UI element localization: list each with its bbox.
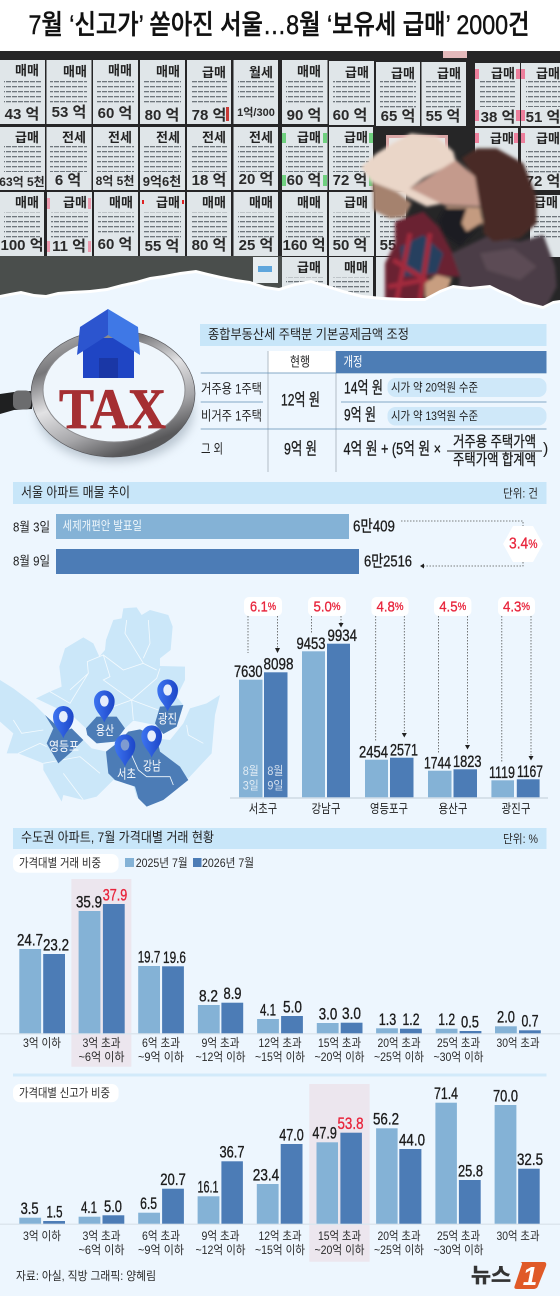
map labels: 영등포 (49, 739, 79, 754)
logo: News1: 1 (523, 1261, 537, 1291)
group: Yongsan (424, 597, 482, 816)
row: others: ) (543, 440, 548, 458)
category labels: 3억 이하 (23, 1036, 61, 1050)
row: non-resident: 시가 약 13억원 수준 (391, 408, 478, 423)
listing cards: row 2: 전세 (156, 130, 180, 145)
listing cards: row 2: 63억 5천 (0, 175, 45, 189)
value labels: 4.1 (260, 1000, 276, 1020)
section heading: 서울 아파트 매물 추이 (21, 485, 130, 500)
listing cards: row 3: 매매 (15, 195, 39, 210)
section heading: metro apartment transactions: 단위: % (503, 832, 538, 846)
listing cards: row 1: 급매 (391, 66, 415, 81)
listing cards: row 3: 매매 (109, 195, 133, 210)
row: others: 그 외 (201, 442, 223, 456)
pin: Seocho (115, 734, 135, 767)
value labels: 8.9 (224, 984, 242, 1003)
value labels: 70.0 (493, 1086, 518, 1106)
dotted change bracket (401, 521, 523, 566)
category labels: 30억 초과 (496, 1229, 540, 1243)
pin: Yongsan (94, 690, 115, 723)
value labels (21, 1084, 543, 1222)
listing cards: row 1: 매매 (297, 64, 321, 79)
value labels: 5.0 (283, 998, 302, 1016)
category labels (23, 1229, 540, 1257)
value labels: 2.0 (497, 1008, 515, 1026)
listing cards: row 1: 매매 (156, 64, 180, 79)
callout: 3.4%: 3.4% (509, 536, 538, 552)
value labels: 23.4 (253, 1166, 279, 1184)
category labels: ~30억 이하 (434, 1243, 484, 1257)
sub-heading pill: record-high share: 가격대별 신고가 비중 (19, 1086, 110, 1100)
listing cards: row 1: 65 억 (381, 108, 415, 125)
listing cards: row 2: 60 억 (287, 172, 321, 189)
listing cards: row 2: 급매 (344, 130, 368, 145)
listing cards: row 3: 80 억 (192, 237, 226, 254)
value labels: 19.6 (163, 948, 186, 967)
listing cards: row 1: 51 억 (526, 109, 560, 126)
listing cards: row 3: 55 (380, 237, 396, 254)
sub-heading pill: transaction share (13, 854, 119, 873)
value labels: 1.2 (438, 1010, 455, 1029)
listing cards: row 2: 급매 (15, 130, 39, 145)
listing cards: row 4: 매매 (344, 260, 368, 275)
row: owner-occupied: 14억 원 (344, 378, 383, 398)
row: others: 주택가액 합계액 (453, 452, 536, 468)
listing cards: row 1: 90 억 (287, 107, 321, 124)
category labels: 6억 초과 (142, 1229, 180, 1243)
category labels: ~20억 이하 (314, 1050, 364, 1064)
listing cards: row 3: 60 억 (98, 236, 132, 253)
category labels: ~15억 이하 (255, 1050, 305, 1064)
map labels: 서초 (117, 766, 136, 782)
listing cards: row 1: 급매 (202, 65, 226, 80)
value labels: 0.7 (522, 1012, 538, 1030)
category labels: ~15억 이하 (255, 1243, 305, 1257)
category labels: 25억 초과 (437, 1229, 480, 1243)
listing cards: row 1: 급매 (345, 65, 369, 80)
listing cards: row 3: 50 억 (333, 237, 367, 254)
row: others: 거주용 주택가액 (453, 434, 536, 450)
value labels: 3.0 (342, 1004, 361, 1023)
listing cards: row 1: 60 억 (333, 107, 367, 124)
column: current: 현행 (290, 354, 310, 370)
map labels: 광진 (158, 712, 177, 726)
category labels: 6억 초과 (142, 1036, 180, 1050)
bar: Aug 9: 6만2516 (364, 552, 412, 570)
category labels: 3억 이하 (23, 1229, 61, 1243)
group: Seocho: 8098 (264, 654, 294, 674)
value labels: 8.2 (199, 986, 218, 1006)
listing cards: row 1: 80 억 (145, 107, 179, 124)
value labels: 1.3 (379, 1010, 396, 1029)
listing cards: row 1: 1억/300 (237, 106, 275, 119)
sub-heading pill: transaction share: 가격대별 거래 비중 (19, 856, 101, 870)
legend (125, 856, 254, 870)
row: non-resident: 9억 원 (344, 406, 376, 424)
listing cards: row 2: 9억6천 (143, 174, 181, 189)
listing cards: row 2: 급매 (536, 131, 560, 146)
listing cards: row 2: 72 억 (333, 172, 367, 189)
category labels: 12억 초과 (258, 1036, 302, 1050)
value labels: 71.4 (434, 1084, 458, 1103)
section heading: 단위: 건 (503, 486, 538, 500)
group: Seocho: 8월 (267, 764, 283, 778)
row: owner-occupied (201, 378, 546, 398)
magnifier handle (0, 390, 32, 414)
category labels: ~6억 이하 (78, 1243, 124, 1257)
listing cards: row 3: 25 억 (239, 237, 273, 254)
category labels: 3억 초과 (82, 1036, 120, 1050)
TAX lettering: TAX (59, 378, 166, 441)
category labels: 25억 초과 (437, 1036, 480, 1050)
listing cards: row 1: 43 억 (5, 106, 39, 123)
listing cards: row 2: 전세 (249, 130, 273, 145)
group: Seocho: 3일 (243, 779, 259, 793)
value labels (17, 886, 538, 1032)
category labels: ~9억 이하 (138, 1050, 184, 1064)
value labels: 20.7 (160, 1170, 186, 1189)
category labels: 15억 초과 (318, 1229, 361, 1243)
group: Seocho (234, 597, 294, 816)
map labels: 용산 (96, 723, 114, 738)
group: Yongsan: 1823 (453, 752, 482, 771)
group: Yongsan: 용산구 (438, 802, 468, 816)
bar chart: listings by district (230, 597, 548, 816)
listing cards: row 1: 60 억 (98, 105, 132, 122)
section heading (13, 482, 546, 504)
category labels: 15억 초과 (318, 1036, 361, 1050)
house (77, 309, 140, 378)
sub-heading pill: record-high share (13, 1084, 119, 1102)
value labels: 6.5 (140, 1194, 157, 1213)
callout: 3.4% (503, 526, 543, 562)
category labels: ~30억 이하 (434, 1050, 484, 1064)
listing cards: row 3: 매매 (297, 195, 321, 210)
row: others (201, 434, 548, 468)
value labels: 1.2 (402, 1010, 420, 1029)
group: Yeongdeungpo: 2454 (359, 742, 388, 762)
group: Yeongdeungpo: 영등포구 (370, 802, 408, 816)
column: revised: 개정 (344, 354, 362, 370)
bar: Aug 9: 8월 9일 (13, 554, 50, 568)
listing cards: row 3: 11 억 (52, 238, 86, 255)
listing cards: row 1: 매매 (108, 63, 132, 78)
legend: 2025년 7월 (136, 856, 188, 870)
value labels: 19.7 (138, 948, 160, 966)
listing cards: row 1: 53 억 (52, 104, 86, 121)
listing cards: row 3: 160 억 (282, 237, 326, 254)
category labels: ~6억 이하 (78, 1050, 124, 1064)
map of Seoul with highlighted districts (0, 607, 220, 807)
pin: Gwangjin (157, 679, 178, 712)
bars (19, 1103, 540, 1224)
listing cards: row 2: 전세 (62, 130, 86, 145)
category labels: ~25억 이하 (374, 1050, 424, 1064)
pin: Gangnam (141, 725, 162, 758)
listing cards: row 1: 월세 (249, 65, 273, 80)
row: owner-occupied: 시가 약 20억원 수준 (391, 380, 478, 394)
group: Gangnam: 9934 (328, 626, 357, 645)
listing cards: row 2: 급매 (297, 130, 321, 145)
table heading (200, 324, 546, 346)
logo: News1: 뉴스 (471, 1265, 511, 1287)
group: Yeongdeungpo: 4.8% (376, 598, 404, 616)
listing cards: row 2: 8억 5천 (96, 174, 134, 188)
bar: Aug 3: 세제개편안 발표일 (62, 519, 142, 533)
value labels: 35.9 (76, 892, 102, 912)
listing cards: row 2: 20 억 (239, 171, 273, 188)
value labels: 23.2 (43, 936, 69, 954)
listing cards: row 4: 급매 (297, 260, 321, 275)
listing cards: row 3: 55 억 (145, 238, 179, 255)
listing cards: row 2: 72 억 (526, 173, 560, 190)
group: Seocho: 6.1% (250, 598, 276, 616)
value labels: 56.2 (373, 1110, 399, 1129)
listing cards: row 1 (0, 60, 560, 126)
value labels: 25.8 (458, 1162, 483, 1180)
row: others: 9억 원 (284, 440, 317, 458)
section heading: metro apartment transactions: 수도권 아파트, 7월 가격대별 거래 현황 (21, 830, 214, 845)
listing cards: row 2: 급매 (490, 131, 514, 146)
map labels (49, 712, 177, 782)
listing cards: row 3: 급매 (63, 195, 87, 210)
torn paper edge (0, 270, 560, 316)
icon: magnifier with house and TAX (0, 309, 195, 462)
section heading: metro apartment transactions (13, 828, 546, 849)
current amount: 12억: 12억 원 (281, 390, 320, 410)
value labels: 24.7 (17, 930, 43, 950)
category labels: 9억 초과 (202, 1229, 240, 1243)
value labels: 47.9 (312, 1124, 337, 1143)
panel: property tax deduction table (200, 324, 548, 472)
listing cards: row 3: 급매 (344, 195, 368, 210)
pin: Yeongdeungpo (53, 706, 74, 738)
listing cards: row 1: 매매 (63, 64, 87, 79)
group: Seocho: 서초구 (249, 802, 277, 816)
listing cards: row 2: 18 억 (192, 172, 226, 189)
category labels (23, 1036, 540, 1064)
group: Gwangjin: 1119 (489, 763, 515, 782)
group: Yeongdeungpo: 2571 (390, 740, 418, 760)
group: Seocho: 9일 (267, 779, 283, 793)
passers-by (361, 133, 557, 310)
group: Gwangjin: 광진구 (502, 802, 530, 816)
listing cards: row 1: 78 억 (192, 107, 226, 124)
category labels: ~25억 이하 (374, 1243, 424, 1257)
group: Seocho: 7630 (234, 662, 262, 681)
group: Yongsan: 4.5% (439, 598, 466, 616)
logo: News1 (471, 1261, 546, 1291)
category labels: 12억 초과 (258, 1229, 302, 1243)
group: Gangnam: 9453 (296, 634, 326, 653)
row: others: 4억 원 + (5억 원 × (344, 440, 441, 458)
bar: Aug 9 (13, 549, 412, 574)
bar chart: transaction share by price band (0, 879, 560, 1067)
bar chart: record-high share by price band (0, 1084, 560, 1262)
value labels: 44.0 (399, 1130, 425, 1150)
group: Gwangjin (489, 597, 543, 816)
bars (19, 904, 541, 1033)
group: Gwangjin: 1167 (517, 762, 543, 781)
listing cards: row 1: 38 억 (481, 109, 515, 126)
listing cards: row 3: 매매 (202, 195, 226, 210)
value labels: 53.8 (338, 1114, 364, 1133)
listing cards: row 1: 매매 (15, 63, 39, 78)
category labels: ~9억 이하 (138, 1243, 184, 1257)
table heading: 종합부동산세 주택분 기본공제금액 조정 (208, 327, 409, 342)
category labels: ~12억 이하 (196, 1243, 246, 1257)
group: Gwangjin: 4.3% (503, 598, 530, 616)
value labels: 3.5 (21, 1199, 39, 1218)
category labels: 3억 초과 (82, 1229, 120, 1243)
photo: real-estate listings window with two passers-by (0, 51, 560, 313)
listing cards: row 3: 급매 (534, 195, 558, 210)
category labels: 30억 초과 (496, 1036, 540, 1050)
listing cards: row 3: 급매 (156, 195, 180, 210)
category labels: 20억 초과 (378, 1229, 420, 1243)
listing cards: row 1: 급매 (536, 66, 560, 81)
legend: 2026년 7월 (202, 856, 254, 870)
listing cards: row 2: 전세 (202, 130, 226, 145)
row: non-resident: 비거주 1주택 (201, 408, 262, 424)
listing cards: row 2 (0, 127, 560, 190)
group: Gangnam: 5.0% (314, 598, 341, 616)
row: owner-occupied: 거주용 1주택 (201, 382, 262, 396)
column: revised (336, 351, 546, 373)
value labels: 32.5 (517, 1150, 543, 1169)
category labels: 20억 초과 (378, 1036, 420, 1050)
row: non-resident (201, 406, 546, 426)
group: Seocho: 8월 (243, 764, 259, 778)
map labels: 강남 (143, 758, 161, 774)
value labels: 0.5 (461, 1012, 479, 1032)
value labels: 1.5 (46, 1202, 62, 1222)
bar: Aug 3: 6만409 (353, 518, 395, 536)
listing cards: row 2: 전세 (108, 130, 132, 145)
listing cards: row 2: 6 억 (55, 172, 81, 189)
group: Yeongdeungpo (359, 597, 418, 816)
value labels: 36.7 (220, 1142, 244, 1162)
listing cards: row 3: 매매 (249, 195, 273, 210)
listing cards: row 3 (0, 192, 560, 257)
bar: Aug 3 (13, 514, 395, 539)
listing cards: row 3: 100 억 (0, 237, 44, 254)
group: Yongsan: 1744 (424, 754, 451, 772)
value labels: 4.1 (81, 1198, 97, 1217)
source credit: 자료: 아실, 직방 그래픽: 양혜림 (16, 1269, 156, 1283)
value labels: 47.0 (279, 1126, 304, 1144)
listing cards: row 4 (253, 257, 391, 298)
bar: Aug 3: 8월 3일 (13, 520, 50, 534)
value labels: 16.1 (198, 1178, 218, 1196)
group: Gangnam: 강남구 (312, 802, 340, 816)
value labels: 5.0 (104, 1197, 122, 1216)
category labels: 9억 초과 (202, 1036, 240, 1050)
listing cards: row 1: 급매 (437, 66, 461, 81)
panel: Seoul apartment listings trend (13, 482, 546, 574)
category labels: ~12억 이하 (196, 1050, 246, 1064)
listing cards: row 1: 55 억 (426, 108, 460, 125)
listing cards: row 1: 급매 (491, 66, 515, 81)
category labels: ~20억 이하 (314, 1243, 364, 1257)
value labels: 3.0 (319, 1004, 337, 1024)
group: Gangnam (296, 597, 357, 816)
value labels: 37.9 (103, 886, 127, 904)
